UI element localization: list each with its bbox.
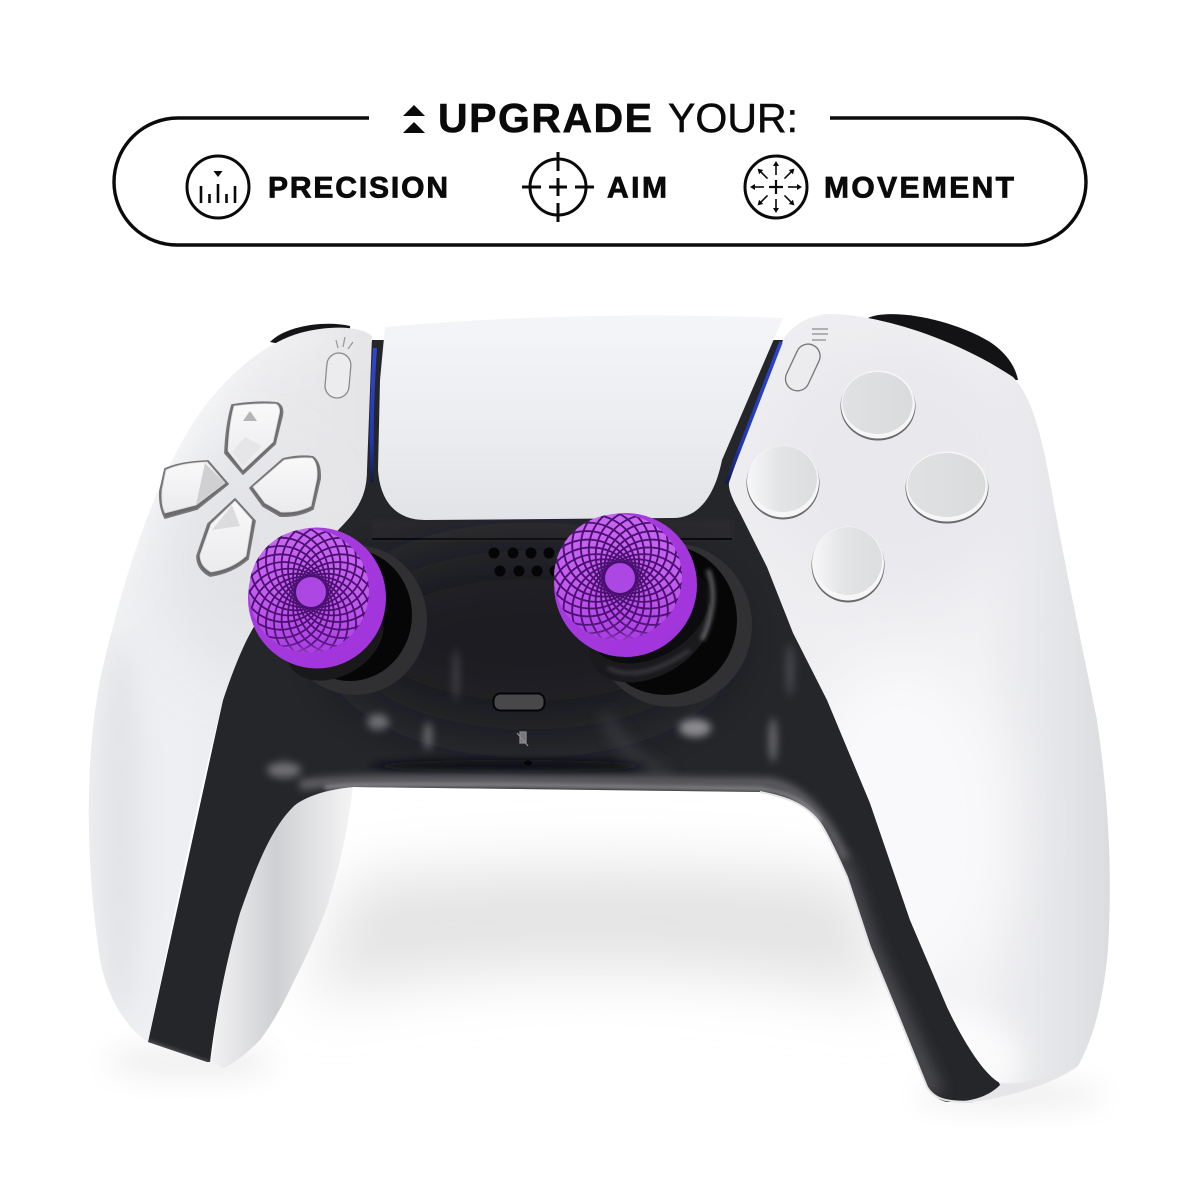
lit rim glow along bottom edge (300, 780, 845, 860)
circle button (906, 452, 988, 524)
cross button (812, 526, 884, 602)
icon: aim crosshair (522, 152, 594, 222)
right shoulder trigger (868, 314, 1018, 380)
right blue light bar (726, 342, 781, 484)
d-pad facets (243, 411, 257, 421)
mesh pattern right (554, 514, 682, 640)
under-rim dark band (370, 760, 650, 772)
game controller (80, 300, 1115, 1120)
d-pad faces (162, 404, 317, 572)
left purple thumbstick (248, 528, 386, 668)
mic icon (517, 732, 528, 746)
options button (782, 329, 828, 395)
icon: precision (187, 156, 249, 218)
thin shell edge along right grip (760, 792, 973, 1102)
triangle button (840, 370, 916, 440)
centre disc right (605, 563, 635, 593)
grip outer highlight (840, 860, 935, 1095)
left stick well (272, 545, 427, 697)
label: precision: PRECISION (268, 172, 448, 204)
banner outline pill (114, 118, 1086, 245)
banner: upgrade your (114, 95, 1086, 245)
ground shadow (105, 865, 1105, 1111)
centre disc left (296, 577, 326, 607)
dark surface highlights (267, 644, 794, 778)
heading: upgrade: UPGRADE (438, 95, 652, 141)
left blue light bar (372, 348, 375, 482)
lit rim along bottom edge (325, 785, 820, 822)
touchpad (378, 315, 783, 520)
lower left inner grip (212, 787, 353, 1068)
label: movement: MOVEMENT (824, 172, 1014, 204)
lower right outer shell (947, 1066, 1078, 1102)
icon: movement arrows (745, 156, 807, 218)
d-pad (160, 402, 320, 576)
create button (324, 337, 353, 399)
right wing (725, 310, 1115, 1120)
right purple thumbstick (554, 513, 697, 657)
d-pad shadow outlines (160, 402, 320, 576)
right stick well (571, 543, 752, 707)
left shoulder trigger (270, 324, 350, 345)
heading: your: YOUR: (668, 95, 798, 141)
left wing (80, 300, 380, 1050)
icon: double up arrows (403, 105, 425, 133)
label: aim: AIM (607, 172, 667, 204)
mesh pattern left (249, 529, 369, 653)
square button (746, 446, 820, 520)
black centre and grip strips (140, 330, 1010, 1110)
speaker holes (488, 548, 560, 576)
mic hole (524, 760, 532, 766)
ps button (494, 694, 544, 710)
